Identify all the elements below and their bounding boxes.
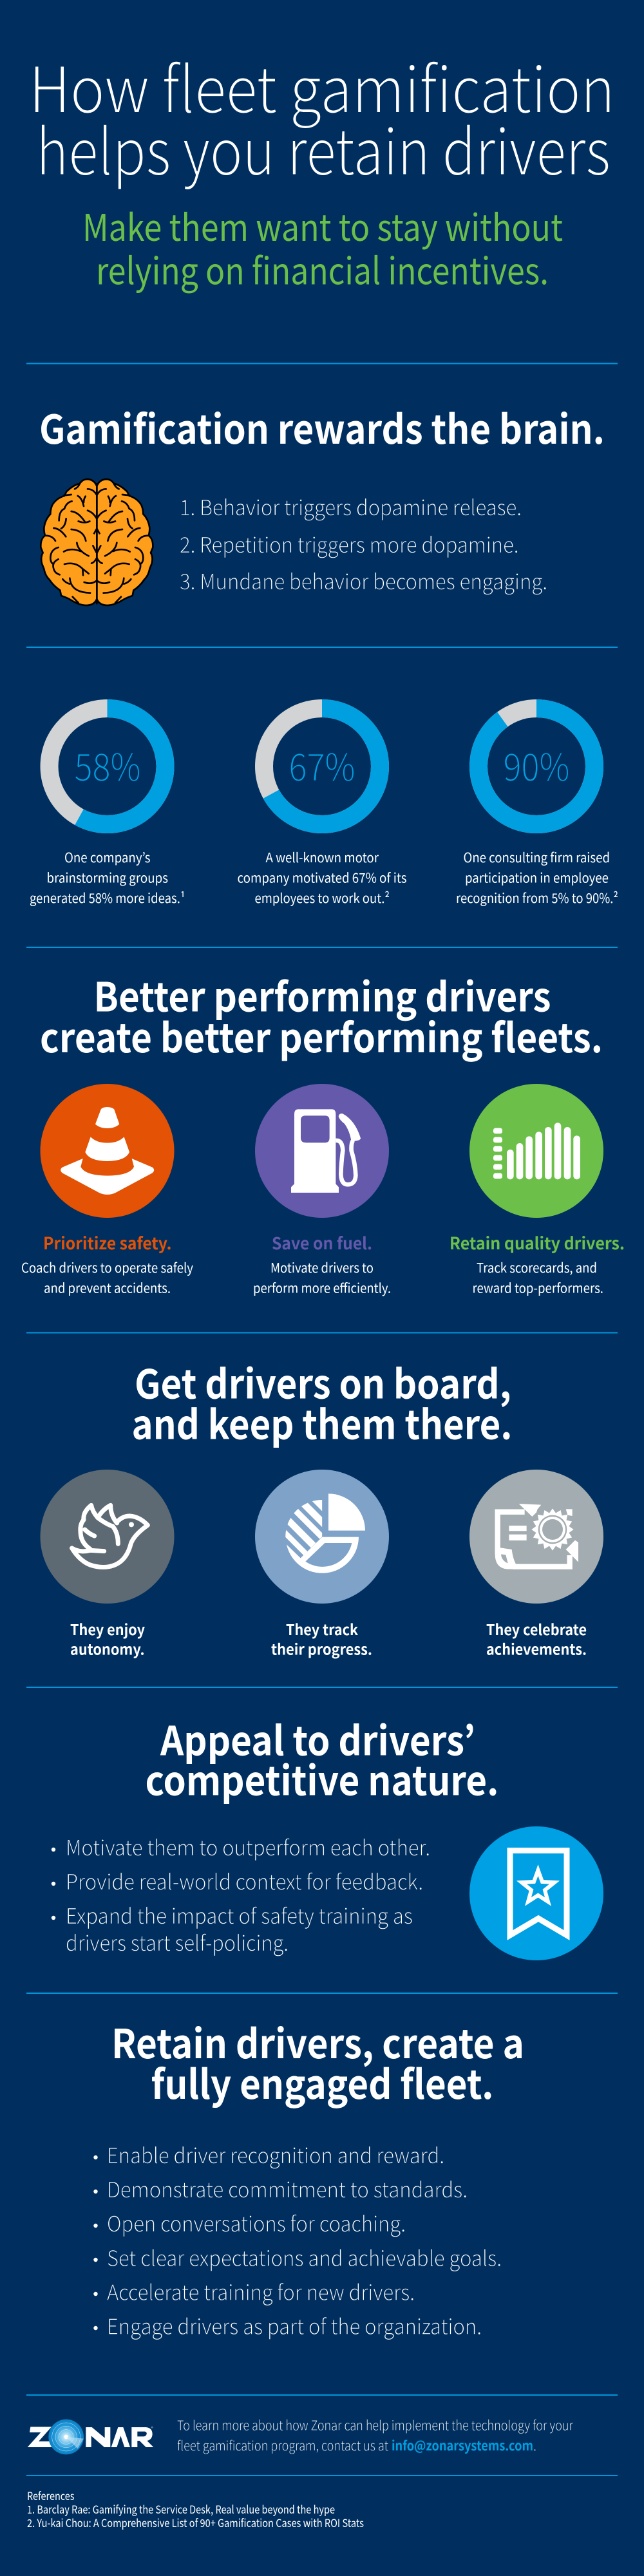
logo: Zonar: ® [151,2425,153,2431]
panel: statistics donuts [30,708,618,907]
heading [111,2012,524,2110]
heading [131,1352,513,1450]
label: prioritize safety [21,1231,193,1297]
contact text [177,2415,574,2454]
logo: Zonar [28,2420,153,2454]
heading: Gamification rewards the brain. [39,397,605,455]
heading: Get drivers on board, [135,1352,511,1410]
numbered list: 1. Behavior triggers dopamine release. [180,491,522,522]
panel: competitive nature [52,1709,603,1960]
bullet list [52,1831,430,1957]
caption: 67%: A well-known motor [265,847,379,866]
caption: 67%: company motivated 67% of its [237,867,407,886]
bullet list: Demonstrate commitment to standards. [107,2173,468,2204]
label: celebrate achievements: They celebrate [486,1618,587,1640]
subtitle: Make them want to stay without [82,199,563,252]
bullet list: Expand the impact of safety training as [66,1899,413,1930]
bullet list: Enable driver recognition and reward. [107,2139,444,2170]
references: 1. Barclay Rae: Gamifying the Service Desk, Real value beyond the hype [27,2501,335,2517]
contact text: info@zonarsystems.com [392,2435,533,2454]
label: prioritize safety: and prevent accidents. [44,1278,171,1297]
bullet list: Motivate them to outperform each other. [66,1831,430,1862]
heading: Better performing drivers [94,965,551,1023]
panel: get drivers on board [40,1352,603,1659]
donut chart: 90% [478,708,594,824]
icon: certificate [469,1470,603,1604]
heading: Appeal to drivers’ [160,1709,475,1767]
bullet list: Accelerate training for new drivers. [107,2276,415,2307]
references [27,2487,364,2530]
caption: 90%: One consulting firm raised [464,847,610,866]
label: retain quality drivers: Track scorecards, and [477,1257,597,1276]
label: celebrate achievements [486,1618,587,1659]
donut chart: 58%: 58% [75,737,140,791]
icon: bar scorecard [469,1084,603,1218]
bullet list: Engage drivers as part of the organization. [107,2309,482,2340]
heading: and keep them there. [131,1392,513,1450]
icon: traffic cone [40,1084,174,1218]
label: track progress: They track [286,1618,358,1640]
label: autonomy: They enjoy [70,1618,145,1640]
label: track progress: their progress. [271,1637,372,1659]
heading: create better performing fleets. [40,1006,603,1064]
label: retain quality drivers [450,1231,625,1297]
icon: ribbon with star [469,1826,603,1960]
subtitle [82,199,563,295]
caption: 67%: employees to work out.² [255,887,390,907]
label: autonomy: autonomy. [70,1637,144,1659]
label: save on fuel: Save on fuel. [272,1231,372,1255]
heading: fully engaged fleet. [151,2052,493,2110]
caption: 90%: participation in employee [465,867,609,886]
caption: 90% [456,847,618,907]
heading: competitive nature. [146,1749,498,1807]
label: track progress [271,1618,372,1659]
bullet list: Provide real-world context for feedback. [66,1865,423,1896]
heading [40,965,603,1064]
contact text: . [533,2435,536,2454]
panel: gamification rewards the brain [39,397,605,605]
bullet list: drivers start self-policing. [66,1926,289,1957]
references: 2. Yu-kai Chou: A Comprehensive List of 90+ Gamification Cases with ROI Stats [27,2514,364,2530]
icon: brain [41,479,153,605]
label: save on fuel [253,1231,391,1297]
donut chart: 58% [49,708,165,824]
label: save on fuel: perform more efficiently. [253,1278,391,1297]
panel: fully engaged fleet [93,2012,524,2340]
donut chart: 67% [264,708,380,824]
label: celebrate achievements: achievements. [486,1637,587,1659]
caption: 90%: recognition from 5% to 90%.² [456,887,618,907]
label: autonomy [70,1618,145,1659]
label: retain quality drivers: Retain quality drivers. [450,1231,625,1255]
subtitle: relying on financial incentives. [96,242,549,295]
icon: fuel pump [255,1084,389,1218]
caption: 58%: One company’s [64,847,151,866]
caption: 67% [237,847,407,907]
contact text: To learn more about how Zonar can help implement the technology for your [177,2415,574,2434]
contact text: fleet gamification program, contact us at [177,2435,388,2454]
references: References [27,2487,75,2503]
label: prioritize safety: Prioritize safety. [43,1231,171,1255]
bullet list [93,2139,502,2340]
numbered list [180,491,547,596]
label: retain quality drivers: reward top-performers. [473,1278,603,1297]
bullet list: Set clear expectations and achievable goals. [107,2241,502,2272]
heading [146,1709,498,1807]
numbered list: 2. Repetition triggers more dopamine. [180,528,519,559]
caption: 58% [30,847,185,907]
bullet list: Open conversations for coaching. [107,2207,406,2238]
label: save on fuel: Motivate drivers to [270,1257,374,1276]
label: prioritize safety: Coach drivers to operate safely [21,1257,193,1276]
footer: logo and contact [28,2415,574,2454]
donut chart: 67%: 67% [289,737,355,791]
icon: pie chart [255,1470,389,1604]
icon: dove [40,1470,174,1604]
caption: 58%: generated 58% more ideas.¹ [30,887,185,907]
caption: 58%: brainstorming groups [46,867,168,886]
numbered list: 3. Mundane behavior becomes engaging. [180,565,547,596]
title [29,40,615,193]
panel: better performing drivers [21,965,625,1297]
heading: Retain drivers, create a [111,2012,524,2070]
donut chart: 90%: 90% [504,737,569,791]
